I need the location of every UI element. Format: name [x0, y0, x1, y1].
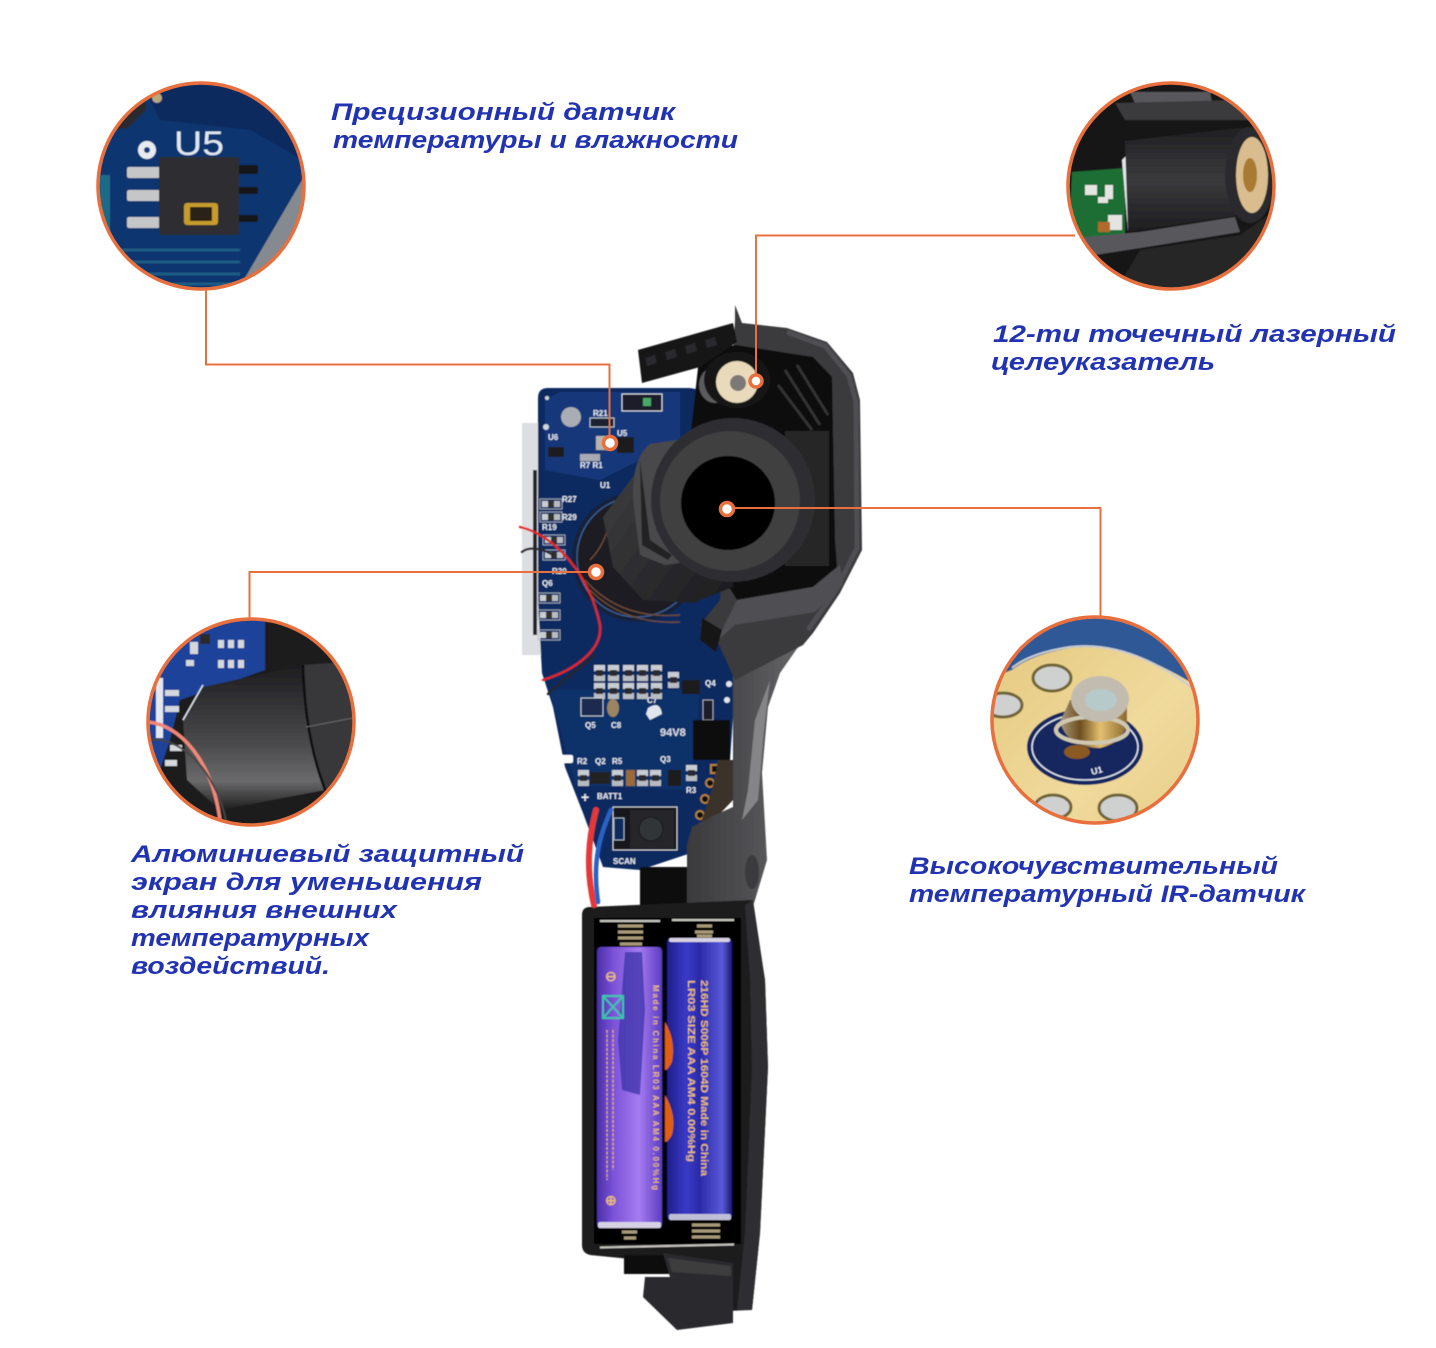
pink and gray wires: [148, 722, 220, 820]
caption: aluminium shield: температурных: [131, 925, 371, 952]
board silk labels: R5: [612, 757, 623, 766]
lens tube body: [603, 420, 733, 603]
board silk labels: R19: [542, 523, 557, 532]
lower row of components: [578, 765, 697, 786]
board silk labels: Q5: [585, 721, 596, 730]
board silk labels: Q6: [542, 579, 553, 588]
board silk labels: R3: [686, 786, 697, 795]
board silk labels: R20: [552, 567, 567, 576]
left battery: [597, 947, 662, 1228]
head inner opening: [690, 345, 837, 600]
head rim outer highlight: [787, 332, 857, 630]
caption: aluminium shield: влияния внешних: [131, 897, 399, 924]
board silk labels: R27: [562, 495, 577, 504]
battery lettering: 216HD S006P 1604D Made in China: [698, 980, 709, 1177]
left battery: ⊕: [605, 1192, 617, 1208]
board silk labels: [542, 409, 716, 866]
caption: aluminium shield: воздействий.: [131, 953, 330, 980]
caption: IR sensor: [909, 853, 1307, 908]
inset: IR sensor macro: [990, 615, 1200, 825]
caption: IR sensor: Высокочувствительный: [909, 853, 1278, 880]
rear connector: [638, 323, 737, 383]
board silk labels: R21: [593, 409, 608, 418]
board silk labels: U1: [600, 481, 611, 490]
brass face: [1236, 137, 1268, 213]
mounting holes: [984, 665, 1137, 821]
LED module: [622, 394, 662, 411]
interior block right of lens: [785, 431, 829, 566]
green laser board: [1070, 168, 1125, 240]
inset: laser module macro: [1066, 81, 1276, 291]
inset: humidity sensor macro: [96, 81, 306, 291]
laser end recess: [1225, 127, 1275, 223]
board silk labels: SCAN: [613, 857, 636, 866]
left translucent strip behind the board: [522, 423, 542, 655]
cylinder barrel: [1124, 128, 1243, 232]
callout lines: [206, 236, 1100, 619]
caption: laser pointer: 12-ти точечный лазерный: [993, 321, 1396, 348]
blue sensor pad: [1027, 709, 1143, 785]
caption: IR sensor: температурный IR-датчик: [909, 881, 1307, 908]
fine print band: [607, 1030, 613, 1180]
board silk labels: U5: [617, 429, 628, 438]
orange contacts between batteries: [665, 1022, 673, 1142]
board silk labels: C8: [611, 721, 622, 730]
battery contact plates: [600, 919, 734, 1249]
caption: aluminium shield: [130, 841, 524, 980]
inset: IR sensor macro: U1: [1090, 764, 1104, 777]
board silk labels: Q4: [705, 679, 716, 688]
lower bar: [1075, 217, 1240, 255]
housing: battery bed: [582, 900, 768, 1312]
lens collar slot: [640, 460, 672, 560]
circuit board: [538, 388, 760, 870]
board silk labels: U6: [548, 433, 559, 442]
board silk labels: Q2: [595, 757, 606, 766]
scan button: [613, 807, 677, 850]
trace lines: [118, 250, 240, 284]
right battery: LR03 SIZE AAA AM4 0.00%Hg: [685, 980, 696, 1162]
black block on board: [693, 720, 730, 760]
caption: laser pointer, line two: целеуказатель: [991, 349, 1215, 376]
silk U5: U5: [174, 125, 224, 163]
caption: humidity sensor, line two: температуры и влажности: [333, 127, 738, 154]
board silk labels: C7: [647, 696, 658, 705]
gray strip: [244, 178, 302, 278]
lens funnel: [660, 431, 800, 571]
caption: aluminium shield: Алюминиевый защитный: [130, 841, 524, 868]
caption: aluminium shield: экран для уменьшения: [131, 869, 482, 896]
sensor wires: [520, 527, 600, 694]
battery wires: [589, 810, 611, 905]
edge plated holes: [696, 765, 719, 819]
sensor can: [1060, 700, 1127, 748]
chip pins: [127, 167, 160, 228]
shield cylinder: [182, 668, 325, 808]
housing: handle: [687, 640, 803, 915]
battery logo: [603, 996, 623, 1018]
brown strip near handle: [695, 760, 733, 840]
handle eyelet: [745, 855, 759, 889]
board silk labels: 94V8: [660, 727, 686, 739]
board silk labels: Q3: [660, 755, 671, 764]
U6 chip: [548, 447, 564, 457]
rim lower strap: [716, 565, 843, 642]
surface mount pads, upper-left column: [538, 499, 565, 640]
blue board edge: [1006, 618, 1189, 682]
battery lettering: Made in China LR03 AAA AM4 0.00%Hg: [651, 985, 660, 1190]
battery compartment cavity: [594, 918, 741, 1244]
board silk labels: BATT1: [597, 792, 623, 801]
wire connector near handle: [700, 618, 722, 652]
lens aperture: [681, 456, 775, 550]
callout dots: [590, 375, 762, 578]
board silk labels: R7 R1: [580, 461, 603, 470]
lens front ring: [651, 418, 815, 582]
housing: head outer rim: [700, 305, 862, 680]
battery springs: [618, 926, 720, 1238]
pin one mark: [138, 141, 156, 159]
cylinder front section: [304, 662, 352, 790]
device: disassembled thermometer: [520, 305, 862, 1330]
battery bed right edge highlight: [737, 900, 768, 1310]
surface mount parts: [165, 640, 244, 766]
handle light stripe: [742, 680, 770, 820]
board silk labels: R29: [562, 513, 577, 522]
lens collar: [633, 438, 700, 565]
sensor leads: [1064, 745, 1090, 759]
dark block below the board: [640, 867, 690, 909]
board silk labels: R2: [577, 757, 588, 766]
white heat shrink edge: [1121, 156, 1129, 232]
laser pointer module: [699, 352, 770, 408]
bottom clip: [624, 1253, 733, 1330]
board silk labels: +: [581, 789, 589, 805]
sensor window: [184, 203, 218, 225]
chip body: [159, 157, 239, 235]
U5 sensor and passives: [596, 436, 610, 450]
inset: aluminium shield macro: [146, 617, 356, 827]
caption: humidity sensor: Прецизионный датчик: [331, 99, 677, 126]
battery polarity marks: ⊖: [605, 968, 617, 984]
mounting screw: [561, 407, 581, 427]
right battery: [667, 938, 732, 1220]
surface mount pads, central rows: [581, 665, 732, 720]
shield cylinder with wound coil: [572, 492, 702, 622]
interior ribs: [778, 365, 828, 430]
white notch in board edge: [557, 755, 573, 763]
